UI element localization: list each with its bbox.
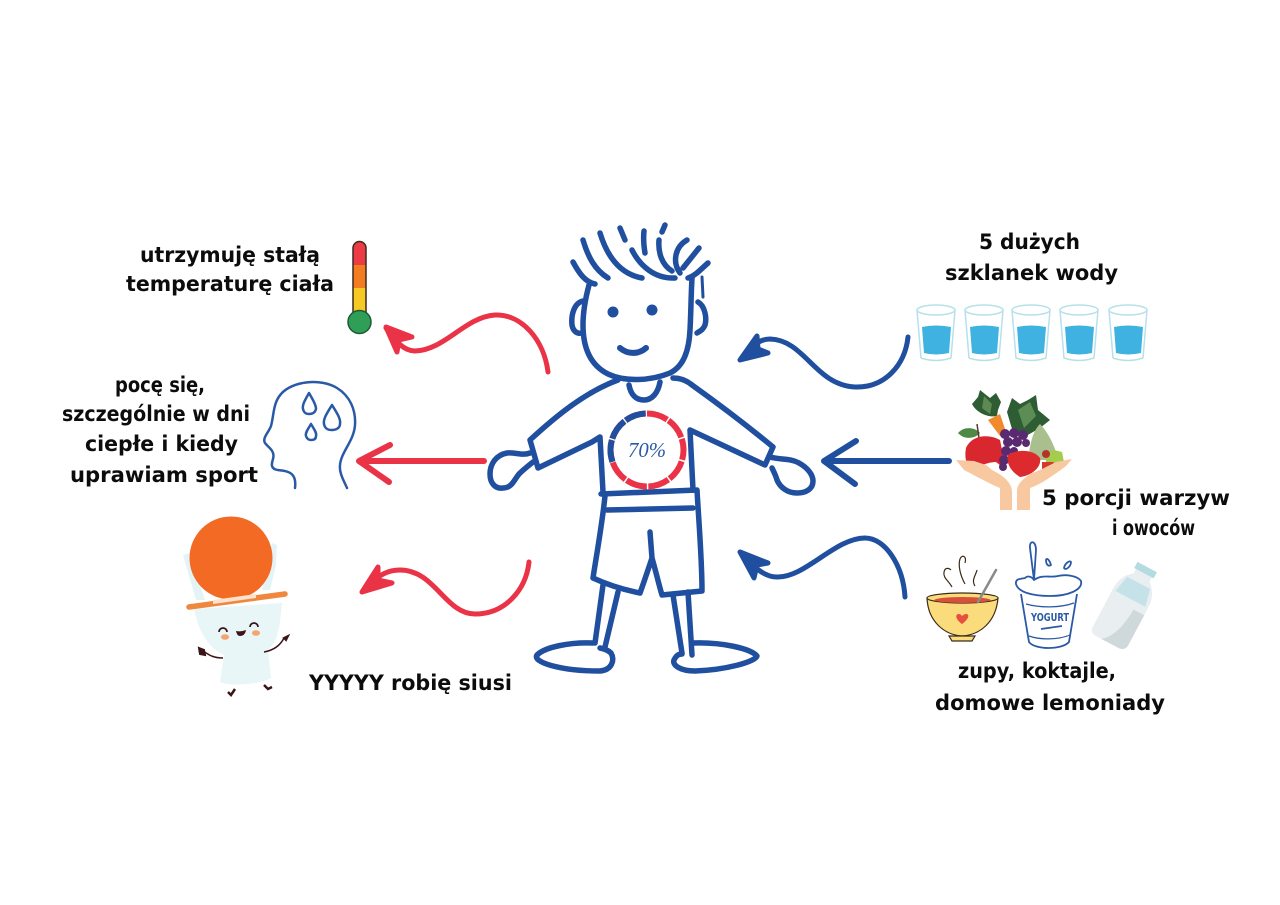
text: temperature xyxy=(126,243,334,296)
icon: eyes xyxy=(608,304,658,318)
carrot xyxy=(988,414,1006,436)
text: vegetables xyxy=(1042,486,1230,540)
icon: five glasses of water xyxy=(917,305,1147,360)
figure: boy xyxy=(490,225,813,671)
icon: happy toilet xyxy=(183,516,288,695)
text: sweating: szczególnie w dni xyxy=(62,402,250,426)
icon: yogurt cup xyxy=(1016,542,1081,648)
text: water xyxy=(945,230,1118,285)
chart: 70% ring xyxy=(601,404,693,496)
ears xyxy=(572,301,706,333)
text: sweating: pocę się, xyxy=(115,373,205,397)
small vegetables xyxy=(1046,450,1064,466)
arrow: red to toilet xyxy=(362,562,529,614)
text: soups: domowe lemoniady xyxy=(935,691,1165,715)
right hand xyxy=(770,457,813,493)
leaves xyxy=(972,390,1001,416)
arrow: blue from vegetables xyxy=(824,441,949,484)
text: temperature: utrzymuję stałą xyxy=(140,243,320,267)
pear xyxy=(1028,424,1058,460)
text: sweating xyxy=(62,373,258,487)
hair xyxy=(573,225,708,284)
head outline xyxy=(583,278,692,380)
tomato xyxy=(1008,451,1040,477)
left arm xyxy=(530,380,618,492)
grapes xyxy=(999,428,1030,471)
right shoe xyxy=(674,643,757,671)
text: vegetables: i owoców xyxy=(1112,516,1195,540)
text: soups xyxy=(935,659,1165,715)
chart: 70% ring: 70% xyxy=(628,438,666,462)
left hand xyxy=(490,453,533,488)
text: vegetables: 5 porcji warzyw xyxy=(1042,486,1230,510)
collar xyxy=(629,382,660,400)
left shoe xyxy=(536,643,613,671)
arrow: red to thermometer xyxy=(386,315,548,372)
arrow: blue from water xyxy=(740,336,908,387)
hands xyxy=(956,460,1012,510)
icon: soup bowl xyxy=(927,556,998,641)
text: water: 5 dużych xyxy=(979,230,1080,254)
arrow: red to sweating head xyxy=(359,445,484,482)
icon: milk bottle xyxy=(1090,558,1165,651)
text: soups: zupy, koktajle, xyxy=(958,659,1116,683)
apple xyxy=(965,436,1006,470)
arrow: blue from soups xyxy=(740,538,905,597)
icon: sweating head xyxy=(264,382,355,488)
icon: hands holding fruit and vegetables xyxy=(956,390,1072,510)
text: sweating: ciepłe i kiedy xyxy=(85,432,238,456)
icon: thermometer xyxy=(348,242,371,334)
text: water: szklanek wody xyxy=(945,261,1118,285)
mouth xyxy=(620,348,646,353)
text: toilet caption: YYYYY robię siusi xyxy=(308,671,512,695)
text: sweating: uprawiam sport xyxy=(70,463,258,487)
legs xyxy=(595,585,692,655)
belt and shorts xyxy=(593,490,702,595)
text: temperature: temperaturę ciała xyxy=(126,272,334,296)
right arm xyxy=(673,378,773,490)
icon: yogurt cup: YOGURT xyxy=(1030,611,1069,624)
